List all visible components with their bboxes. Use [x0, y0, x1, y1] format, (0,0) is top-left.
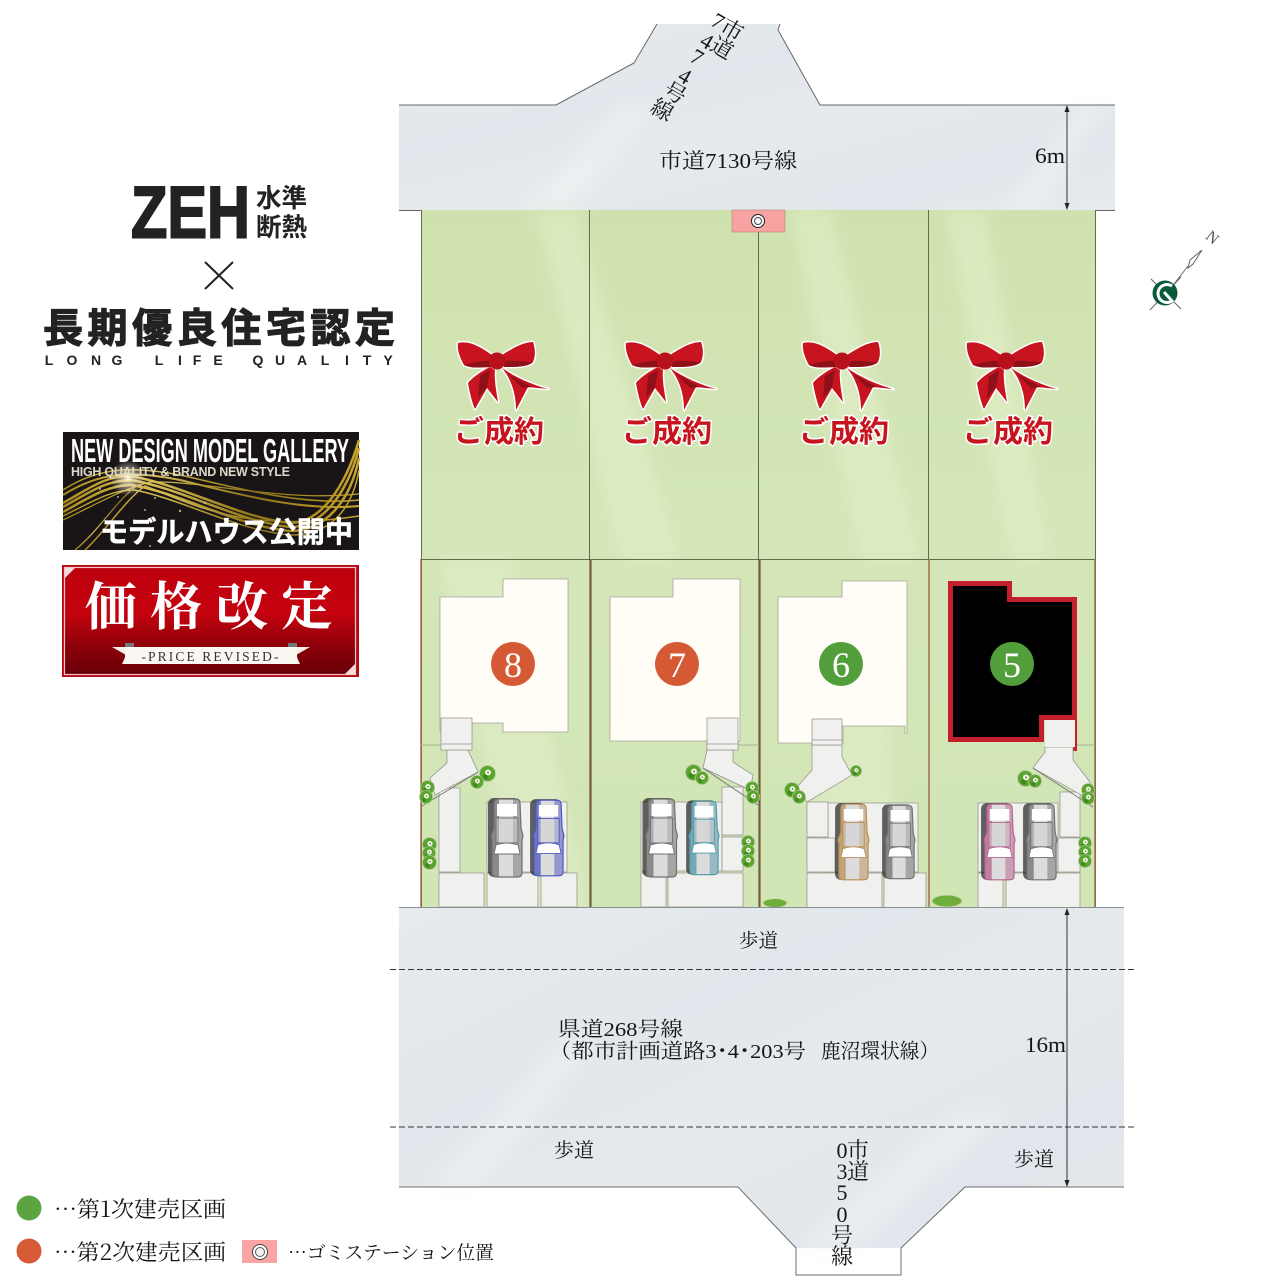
label: prefectural road 268: （都市計画道路3･4･203号 — [549, 1040, 806, 1063]
legend: garbage station: …ゴミステーション位置 — [288, 1238, 494, 1265]
banner: price revised — [62, 565, 359, 677]
garbage station marker — [732, 210, 785, 232]
banner: model house: HIGH QUALITY & BRAND NEW STYLE — [71, 465, 290, 479]
road name: 7474 rotated: 4 — [696, 27, 718, 55]
road name: 7474 rotated: 道 — [706, 32, 738, 64]
long life quality heading: QUALITY — [253, 352, 393, 368]
banner: model house: モデルハウス公開中 — [100, 515, 353, 549]
label: sidewalk right: 歩道 — [1014, 1148, 1054, 1171]
banner: price revised: 価 — [85, 580, 137, 637]
compass: N — [1202, 228, 1222, 249]
road name: 7474 rotated: 7 — [686, 43, 708, 71]
legend: second phase: …第2次建売区画 — [54, 1236, 226, 1267]
sold ribbon: lot 4 — [963, 342, 1057, 449]
banner: price revised: -PRICE REVISED- — [141, 649, 281, 664]
lot 6 — [763, 581, 926, 908]
banner: model house: NEW DESIGN MODEL GALLERY — [71, 432, 349, 469]
dimension: 16m: 16m — [1025, 1032, 1066, 1057]
lot 5: model house — [932, 584, 1095, 908]
banner: price revised: 改 — [216, 580, 268, 637]
lot number 7: 7 — [668, 645, 686, 685]
road name: 0350 vertical: 市 — [847, 1138, 869, 1163]
lot number 8 — [491, 642, 535, 686]
road name: 0350 vertical: 0 — [836, 1138, 848, 1163]
label: prefectural road 268: 鹿沼環状線） — [821, 1040, 939, 1063]
ZEH logo: 断熱 — [256, 214, 308, 242]
long life quality heading: 長期優良住宅認定 — [43, 307, 395, 351]
banner: price revised: 定 — [281, 580, 333, 637]
lot number 8: 8 — [504, 645, 522, 685]
label: prefectural road 268: 県道268号線 — [558, 1018, 684, 1041]
lot number 5 — [990, 642, 1034, 686]
panel: left branding — [43, 172, 395, 677]
long life quality heading: LIFE — [155, 352, 223, 368]
legend — [16, 1193, 494, 1267]
road name: 0350 vertical: 号 — [831, 1223, 853, 1248]
lot 8 — [419, 579, 577, 907]
legend: first phase: …第1次建売区画 — [54, 1193, 226, 1224]
road name: 0350 vertical: 線 — [831, 1244, 853, 1269]
road name: 7474 rotated: 線 — [646, 94, 678, 126]
label: prefectural road 268 — [549, 1018, 939, 1063]
lot number 7 — [655, 642, 699, 686]
road name: 7474 rotated: 号 — [659, 77, 691, 109]
banner: price revised: 格 — [150, 579, 202, 637]
lot number 6: 6 — [832, 645, 850, 685]
road name: 7130: 市道7130号線 — [659, 149, 797, 173]
lot number 5: 5 — [1003, 645, 1021, 685]
road name: 0350 vertical: 5 — [836, 1180, 848, 1205]
road name: 7474 rotated: 7 — [707, 7, 729, 35]
road name: 0350 vertical: 道 — [847, 1159, 869, 1184]
lot number 6 — [819, 642, 863, 686]
lot 7 — [610, 579, 760, 907]
dimension: 16m — [1025, 908, 1070, 1187]
road name: 0350 vertical: 0 — [836, 1202, 848, 1227]
road name: 7474 rotated: 4 — [674, 62, 696, 90]
dimension: 6m — [1035, 105, 1070, 210]
label: sidewalk top: 歩道 — [739, 930, 778, 952]
panel: top road — [399, 7, 1115, 210]
compass — [1150, 228, 1222, 310]
road name: 7474 rotated — [646, 7, 748, 126]
sold ribbon: lot 2 — [622, 342, 716, 449]
panel: lots — [419, 210, 1096, 908]
ZEH logo: 水準 — [256, 185, 307, 213]
road name: 0350 vertical — [831, 1138, 869, 1269]
road name: 0350 vertical: 3 — [836, 1159, 848, 1184]
ZEH logo: ZEH — [131, 172, 250, 254]
long life quality heading: LONG — [45, 352, 123, 368]
dimension: 6m: 6m — [1035, 143, 1065, 168]
road name: 7474 rotated: 市 — [716, 14, 748, 46]
label: sidewalk left: 歩道 — [554, 1139, 594, 1162]
sold ribbon: lot 1 — [454, 342, 548, 449]
multiply sign — [205, 262, 233, 289]
sold ribbon: lot 3 — [799, 342, 893, 449]
banner: model house — [63, 432, 359, 550]
panel: bottom road — [390, 908, 1134, 1275]
